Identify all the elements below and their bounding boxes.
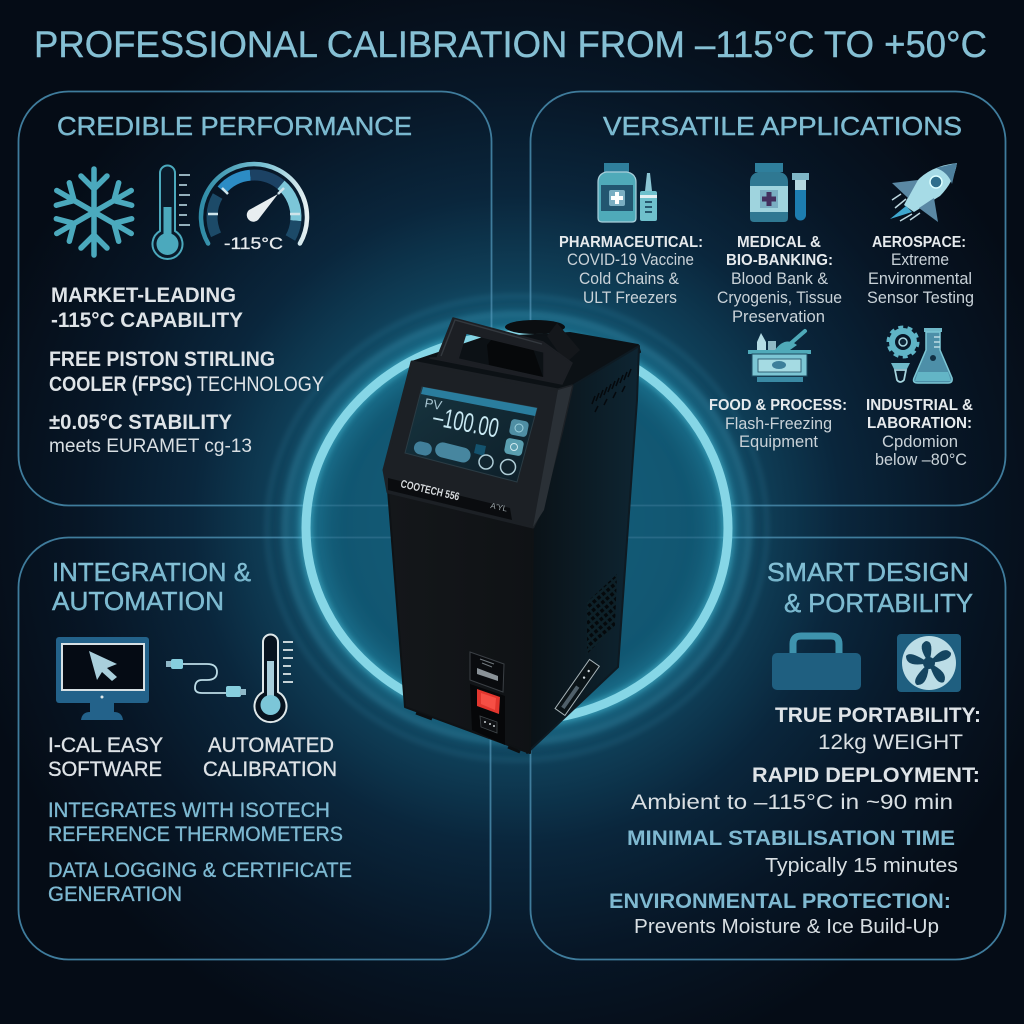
panel content: smart design and portability <box>609 557 981 938</box>
heading <box>52 557 251 616</box>
screen reading: –100.00 <box>431 401 501 443</box>
lid knob <box>487 333 543 377</box>
small logo: A'YL <box>490 501 509 514</box>
title: PROFESSIONAL CALIBRATION FROM –115°C TO +50°C <box>34 24 987 65</box>
screen <box>405 387 537 482</box>
text: food and process: Equipment <box>739 433 818 451</box>
text: industrial and laboration: Cpdomion <box>882 433 958 451</box>
text: pharmaceutical: COVID-19 Vaccine <box>567 251 694 269</box>
text: industrial and laboration: below –80°C <box>875 451 967 469</box>
text: i-cal easy software: SOFTWARE <box>48 758 162 781</box>
icon: monitor <box>56 637 149 720</box>
text: industrial and laboration: LABORATION: <box>867 415 972 432</box>
panel content: versatile applications <box>559 111 974 469</box>
icon: carry case <box>772 636 861 690</box>
icon: gear and flask <box>888 327 952 383</box>
upper vent <box>592 369 631 412</box>
heading <box>767 557 973 618</box>
device side <box>527 346 639 753</box>
connector plate <box>470 652 504 692</box>
icon: food and process <box>748 331 811 382</box>
panel content: integration and automation <box>48 557 352 906</box>
text: rapid deployment: RAPID DEPLOYMENT: <box>752 764 980 787</box>
text: i-cal easy software: I-CAL EASY <box>48 734 163 757</box>
text: environmental protection <box>609 890 951 938</box>
text: market-leading: MARKET-LEADING <box>51 284 236 307</box>
icon: pharma bottle and vial <box>598 163 657 222</box>
icon: cooling fan <box>897 634 961 692</box>
lower vent <box>587 574 617 654</box>
text: medical: MEDICAL & <box>737 234 821 251</box>
text: medical: Blood Bank & <box>731 270 828 288</box>
text: data logging: DATA LOGGING & CERTIFICATE <box>48 859 352 882</box>
text: automated calibration: AUTOMATED <box>208 734 334 757</box>
text: automated calibration <box>203 734 337 781</box>
text: aerospace: AEROSPACE: <box>872 234 966 251</box>
icon: snowflake <box>50 169 138 255</box>
panel content: credible performance <box>49 111 412 457</box>
handle <box>430 318 572 384</box>
icon: cable <box>166 659 246 697</box>
text: environmental protection: ENVIRONMENTAL PROTECTION: <box>609 890 951 913</box>
lid knob rear <box>505 320 565 334</box>
text: minimal stabilisation <box>627 827 958 877</box>
icon: rocket <box>890 163 957 222</box>
text: integrates with isotech <box>48 799 343 846</box>
glowing ring <box>267 296 767 760</box>
text: market-leading: -115°C CAPABILITY <box>51 309 243 332</box>
heading: & PORTABILITY <box>784 588 973 618</box>
logo strip <box>388 478 512 520</box>
text: FPSC: COOLER (FPSC) TECHNOLOGY <box>49 373 324 396</box>
heading: CREDIBLE PERFORMANCE <box>57 111 412 141</box>
screen PV label: PV <box>423 395 443 413</box>
text: true portability: TRUE PORTABILITY: <box>775 704 981 727</box>
device top <box>412 333 640 392</box>
text: medical: Preservation <box>732 308 825 326</box>
text: pharmaceutical: ULT Freezers <box>583 289 677 307</box>
icon: thermometer <box>254 635 293 722</box>
text: i-cal easy software <box>48 734 163 781</box>
text: rapid deployment: Ambient to –115°C in ~90 min <box>631 791 953 814</box>
text: true portability: 12kg WEIGHT <box>818 731 963 754</box>
heading: INTEGRATION & <box>52 557 251 587</box>
text: stability <box>49 411 252 457</box>
text: FPSC <box>49 348 324 396</box>
panel: smart design and portability border <box>530 538 1006 960</box>
text: aerospace: Extreme <box>891 251 949 269</box>
icon: gauge <box>201 164 307 253</box>
screen buttons <box>413 418 529 474</box>
device front body <box>388 490 533 753</box>
heading: AUTOMATION <box>52 586 224 616</box>
panel: integration and automation border <box>18 538 490 960</box>
icon: thermometer <box>152 166 190 259</box>
power switch and socket <box>470 684 505 745</box>
text: medical: BIO-BANKING: <box>726 252 833 269</box>
heading: SMART DESIGN <box>767 557 969 587</box>
text: food and process: FOOD & PROCESS: <box>709 397 847 414</box>
text: pharmaceutical <box>559 234 703 307</box>
device: temperature calibrator <box>384 318 640 753</box>
head edge <box>533 386 572 527</box>
handle highlight <box>441 320 542 356</box>
text: pharmaceutical: PHARMACEUTICAL: <box>559 234 703 251</box>
icon: medical bottle and test tube <box>750 163 809 222</box>
lid latch <box>547 323 580 363</box>
text: aerospace <box>867 234 974 307</box>
text: integrates with isotech: INTEGRATES WITH ISOTECH <box>48 799 330 822</box>
text: stability: meets EURAMET cg-13 <box>49 436 252 457</box>
text: stability: ±0.05°C STABILITY <box>49 411 232 434</box>
text: minimal stabilisation: Typically 15 minutes <box>765 855 958 877</box>
text: automated calibration: CALIBRATION <box>203 758 337 781</box>
text: medical: Cryogenis, Tissue <box>717 289 842 307</box>
text: true portability <box>775 704 981 754</box>
side label plate <box>555 659 599 715</box>
text: food and process: Flash-Freezing <box>725 415 832 433</box>
text: industrial and laboration: INDUSTRIAL & <box>866 397 973 414</box>
text: minimal stabilisation: MINIMAL STABILISATION TIME <box>627 827 955 850</box>
text: integrates with isotech: REFERENCE THERMOMETERS <box>48 823 343 846</box>
text: aerospace: Environmental <box>868 270 972 288</box>
text: rapid deployment <box>631 764 980 814</box>
head housing <box>384 362 572 527</box>
text: medical <box>717 234 842 326</box>
text: FPSC: FREE PISTON STIRLING <box>49 348 275 371</box>
text: environmental protection: Prevents Moisture & Ice Build-Up <box>634 916 939 938</box>
text: data logging <box>48 859 352 906</box>
panel: credible performance border <box>18 92 492 506</box>
brand text: COOTECH 556 <box>399 478 460 503</box>
text: aerospace: Sensor Testing <box>867 289 974 307</box>
screen status bar <box>421 387 537 416</box>
text: pharmaceutical: Cold Chains & <box>579 270 679 288</box>
heading: VERSATILE APPLICATIONS <box>603 111 962 141</box>
panel: versatile applications border <box>530 92 1006 506</box>
text: industrial and laboration <box>866 397 973 469</box>
text: data logging: GENERATION <box>48 883 182 906</box>
feet <box>416 713 520 752</box>
text: market-leading <box>51 284 243 332</box>
gauge value: -115°C <box>224 234 283 253</box>
text: food and process <box>709 397 847 451</box>
